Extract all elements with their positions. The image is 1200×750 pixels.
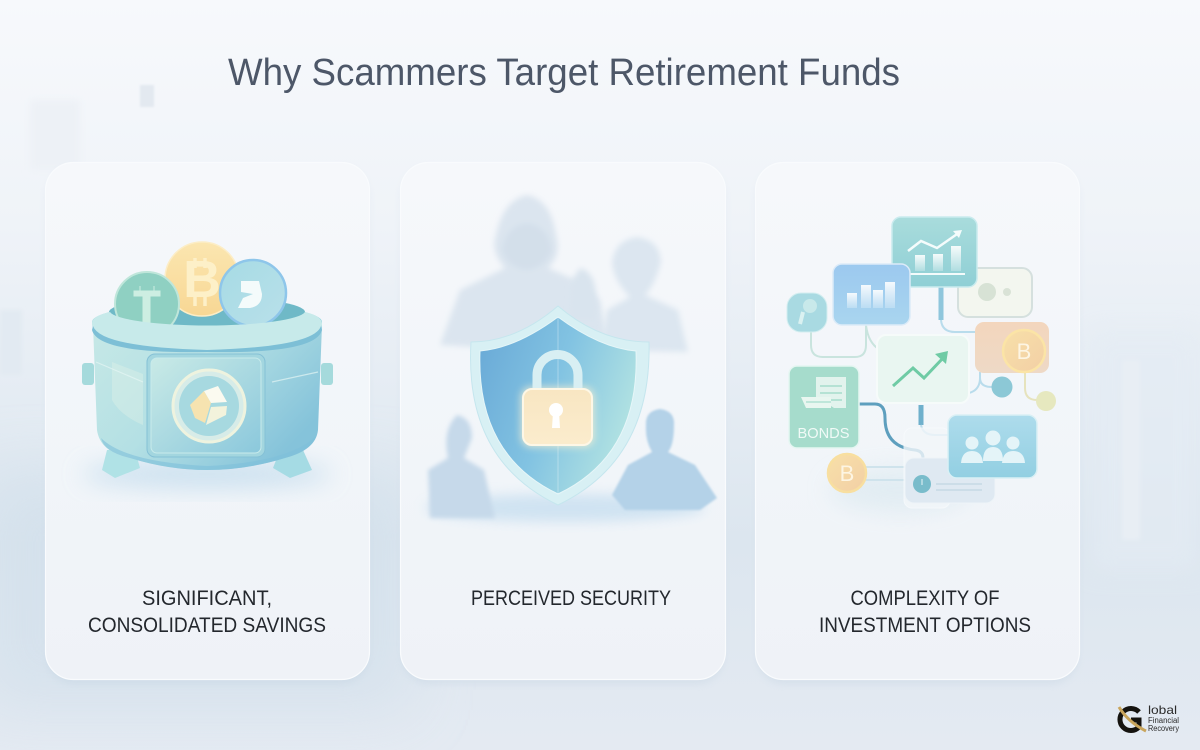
icon: savings pot with crypto coins xyxy=(82,242,333,488)
tile: bonds: BONDS xyxy=(798,425,850,442)
coin: bitcoin: B xyxy=(183,251,221,309)
tile: center growth chart xyxy=(877,335,969,403)
padlock xyxy=(521,354,594,447)
tile: timer list xyxy=(905,458,995,503)
label: PERCEIVED SECURITY xyxy=(471,587,671,610)
coin: tether xyxy=(115,272,179,336)
tile: peach with bitcoin coin: B xyxy=(1017,339,1031,364)
silhouette: person center xyxy=(570,268,596,320)
tile: search xyxy=(787,293,827,332)
tile: rising chart xyxy=(892,217,977,287)
tile: bonds xyxy=(789,366,859,448)
silhouette: person lower left xyxy=(428,415,495,518)
silhouette: person lower right xyxy=(612,409,717,510)
logo: Global Financial Recovery: Financial xyxy=(1148,716,1179,725)
label line 2: CONSOLIDATED SAVINGS xyxy=(88,614,326,637)
panel: complexity of investment options xyxy=(756,162,1080,684)
tile: peach with bitcoin coin xyxy=(975,322,1049,373)
silhouette: hooded scammer xyxy=(440,195,610,355)
tile: blank indicators xyxy=(958,268,1032,317)
title: Why Scammers Target Retirement Funds xyxy=(228,52,900,94)
panel: perceived security xyxy=(400,162,726,684)
dots xyxy=(992,376,1056,411)
coin: bottom B xyxy=(828,454,866,492)
illustration: silhouettes behind shield xyxy=(425,195,717,522)
icon: shield with padlock xyxy=(471,306,649,505)
diagram: investment options network xyxy=(787,217,1056,512)
coin: blue token xyxy=(220,260,286,326)
label: COMPLEXITY OF xyxy=(850,587,1000,610)
tile: people xyxy=(948,415,1037,478)
coin: bottom B: B xyxy=(840,461,854,486)
connectors xyxy=(811,287,1037,480)
label: SIGNIFICANT, xyxy=(142,587,272,610)
logo: Global Financial Recovery: Recovery xyxy=(1148,724,1179,733)
logo: Global Financial Recovery xyxy=(1119,703,1179,733)
silhouette: person right xyxy=(600,237,688,352)
tile: bar chart xyxy=(833,264,910,325)
logo: Global Financial Recovery: lobal xyxy=(1148,703,1177,717)
label line 2: INVESTMENT OPTIONS xyxy=(819,614,1031,637)
coin: bitcoin xyxy=(165,242,239,316)
placeholder card behind xyxy=(904,428,950,508)
panel: significant, consolidated savings xyxy=(46,162,370,684)
plate emblem xyxy=(147,354,265,457)
